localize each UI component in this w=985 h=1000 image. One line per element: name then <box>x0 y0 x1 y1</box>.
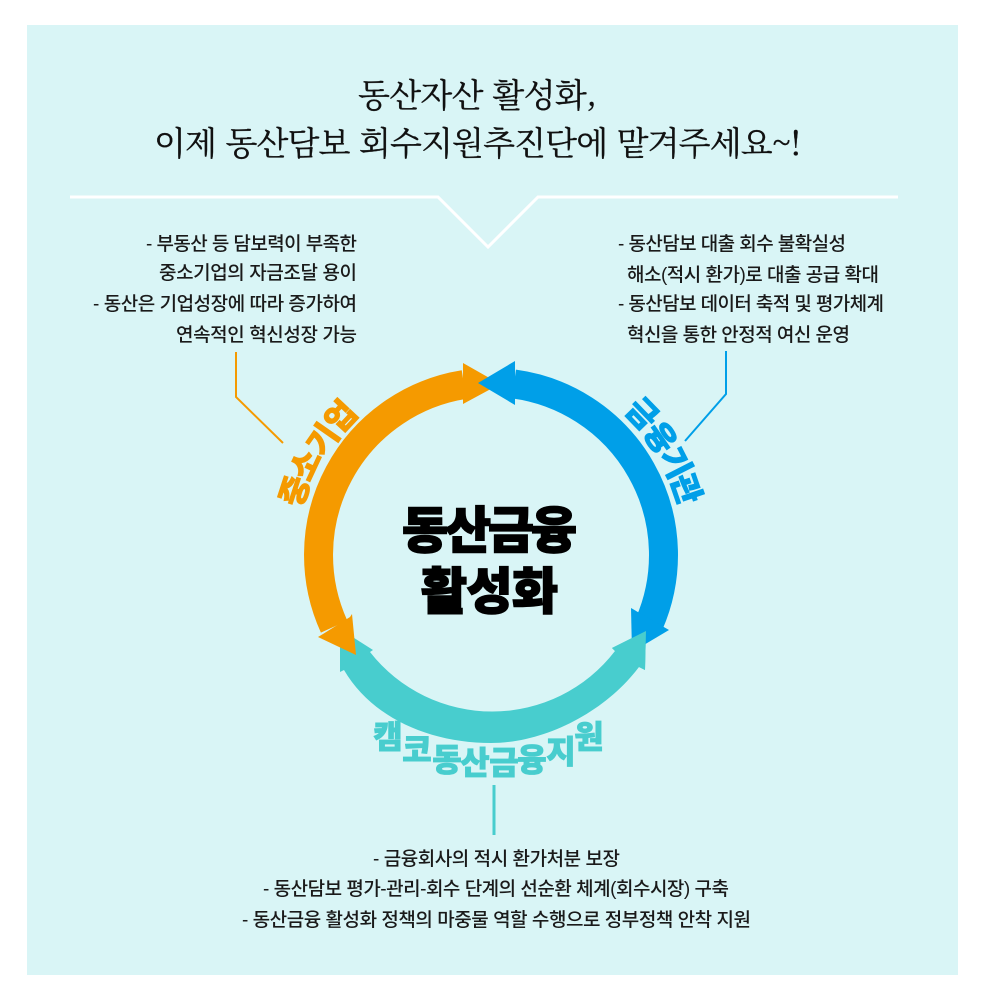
text block: financial institution benefits: - 동산담보 대출 회수 불확실성 <box>618 233 846 255</box>
center label: 동산금융 <box>402 503 577 559</box>
curved label: financial institutions: 기 <box>652 442 698 484</box>
text block: financial institution benefits: 혁신을 통한 안정적 여신 운영 <box>627 324 850 346</box>
text block: SME benefits <box>93 233 357 346</box>
title: 동산자산 활성화, <box>358 70 597 117</box>
curved label: KAMCO: 동 <box>432 742 462 778</box>
leader line: blue <box>685 351 726 441</box>
leader line: teal <box>492 785 496 835</box>
curved label: KAMCO: 캠 <box>373 719 403 755</box>
curved label: SME: 기 <box>300 418 346 462</box>
text block: financial institution benefits: - 동산담보 데이터 축적 및 평가체계 <box>618 293 884 315</box>
curved label: financial institutions <box>619 391 708 509</box>
leader line: orange <box>236 352 283 443</box>
title: 이제 동산담보 회수지원추진단에 맡겨주세요~! <box>154 118 801 165</box>
text block: SME benefits: - 부동산 등 담보력이 부족한 <box>146 233 357 255</box>
curved label: SME: 업 <box>318 394 364 440</box>
curved label: SME: 중 <box>273 471 317 511</box>
center label <box>402 503 577 620</box>
center label: 활성화 <box>421 564 558 620</box>
arrow: orange arc <box>318 363 500 655</box>
text block: KAMCO support: - 동산금융 활성화 정책의 마중물 역할 수행으로 정부정책 안착 지원 <box>242 909 751 931</box>
curved label: financial institutions: 금 <box>619 391 665 437</box>
arrow: teal arc <box>340 629 646 743</box>
teal arrow tip over blue <box>612 631 646 670</box>
text block: SME benefits: - 동산은 기업성장에 따라 증가하여 <box>93 293 357 315</box>
curved label: KAMCO: 원 <box>574 719 604 755</box>
text block: KAMCO support <box>242 848 751 931</box>
text block: KAMCO support: - 동산담보 평가-관리-회수 단계의 선순환 체계(회수시장) 구축 <box>263 878 729 900</box>
curved label: KAMCO: 융 <box>517 742 547 778</box>
curved label: SME: 소 <box>283 444 329 486</box>
text block: SME benefits: 중소기업의 자금조달 용이 <box>159 262 357 284</box>
text block: financial institution benefits: 해소(적시 환가)로 대출 공급 확대 <box>627 264 879 286</box>
arrow: blue arc <box>478 361 669 652</box>
curved label: financial institutions: 관 <box>664 469 708 509</box>
curved label: KAMCO <box>373 719 604 781</box>
curved label: KAMCO: 코 <box>402 732 432 768</box>
curved label: KAMCO: 금 <box>489 745 519 781</box>
text block: KAMCO support: - 금융회사의 적시 환가처분 보장 <box>373 848 620 870</box>
text block: SME benefits: 연속적인 혁신성장 가능 <box>176 324 357 346</box>
title <box>154 70 801 165</box>
text block: financial institution benefits <box>618 233 884 346</box>
curved label: KAMCO: 산 <box>460 745 490 781</box>
curved label: SME <box>273 394 364 511</box>
curved label: financial institutions: 융 <box>637 416 683 460</box>
curved label: KAMCO: 지 <box>546 734 576 770</box>
